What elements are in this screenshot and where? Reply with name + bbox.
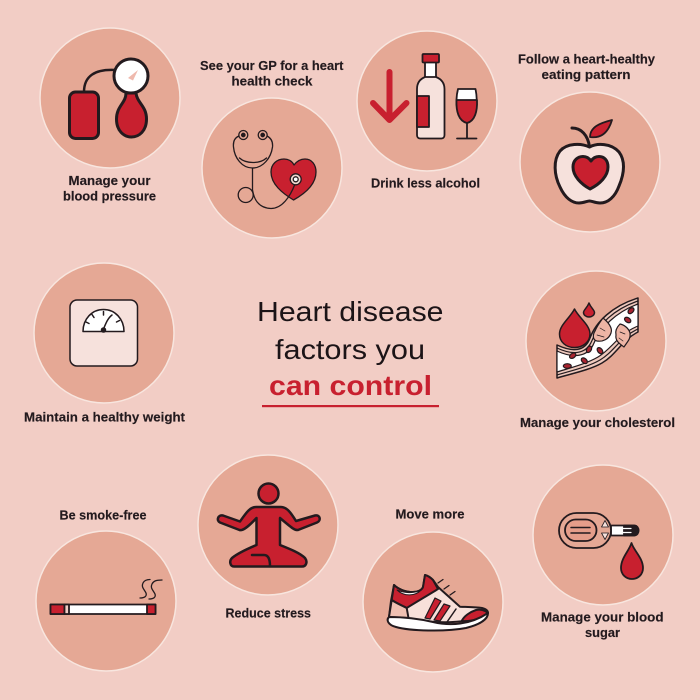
title block: Heart disease bbox=[257, 296, 444, 327]
label: follow a heart-healthy eating pattern: eating pattern bbox=[542, 68, 630, 82]
panel: healthy weight bbox=[24, 263, 186, 424]
panel: smoke-free bbox=[36, 508, 176, 671]
label: follow a heart-healthy eating pattern bbox=[518, 52, 655, 82]
label: see your GP bbox=[200, 59, 344, 88]
title block bbox=[257, 296, 444, 407]
label: manage your blood sugar bbox=[541, 610, 664, 640]
label: drink less alcohol: Drink less alcohol bbox=[371, 176, 480, 190]
icon: cigarette and smoke bbox=[50, 580, 162, 614]
icon: glucose meter and drop bbox=[559, 513, 643, 579]
label: move more: Move more bbox=[396, 508, 465, 522]
panel: GP heart check bbox=[200, 59, 344, 238]
icon: running shoe bbox=[388, 575, 488, 631]
label: manage your blood sugar: Manage your blood bbox=[541, 610, 664, 624]
panel: heart-healthy eating bbox=[518, 52, 660, 232]
label: manage your cholesterol: Manage your cholesterol bbox=[520, 416, 675, 430]
label: manage your blood pressure: blood pressure bbox=[63, 190, 156, 204]
title block: factors you bbox=[275, 334, 425, 365]
icon: weighing scale bbox=[70, 300, 138, 366]
label: follow a heart-healthy eating pattern: Follow a heart-healthy bbox=[518, 52, 655, 66]
icon: stethoscope and heart bbox=[233, 130, 316, 208]
icon: blood pressure monitor bbox=[70, 59, 148, 138]
icon: meditating person bbox=[218, 484, 320, 566]
icon: apple with heart bbox=[555, 120, 624, 203]
label: be smoke-free: Be smoke-free bbox=[60, 508, 147, 522]
icon: artery and blood drops bbox=[557, 298, 638, 378]
icon: wine bottle and glass bbox=[417, 54, 477, 138]
label: maintain a healthy weight: Maintain a healthy weight bbox=[24, 410, 186, 424]
label: manage your blood sugar: sugar bbox=[585, 626, 620, 640]
panel: move more bbox=[363, 508, 503, 672]
panel: blood sugar bbox=[533, 465, 673, 640]
panel: cholesterol bbox=[520, 271, 675, 430]
label: manage your blood pressure: Manage your bbox=[68, 174, 151, 188]
label: manage your blood pressure bbox=[63, 174, 156, 204]
label: see your GP: See your GP for a heart bbox=[200, 59, 344, 73]
icon: down arrow bbox=[373, 72, 406, 120]
label: reduce stress: Reduce stress bbox=[226, 606, 311, 620]
title block: can control bbox=[269, 370, 432, 401]
panel: reduce stress bbox=[198, 455, 338, 620]
label: see your GP: health check bbox=[232, 74, 313, 88]
panel: blood pressure bbox=[40, 28, 180, 204]
panel: drink less alcohol bbox=[357, 31, 497, 190]
